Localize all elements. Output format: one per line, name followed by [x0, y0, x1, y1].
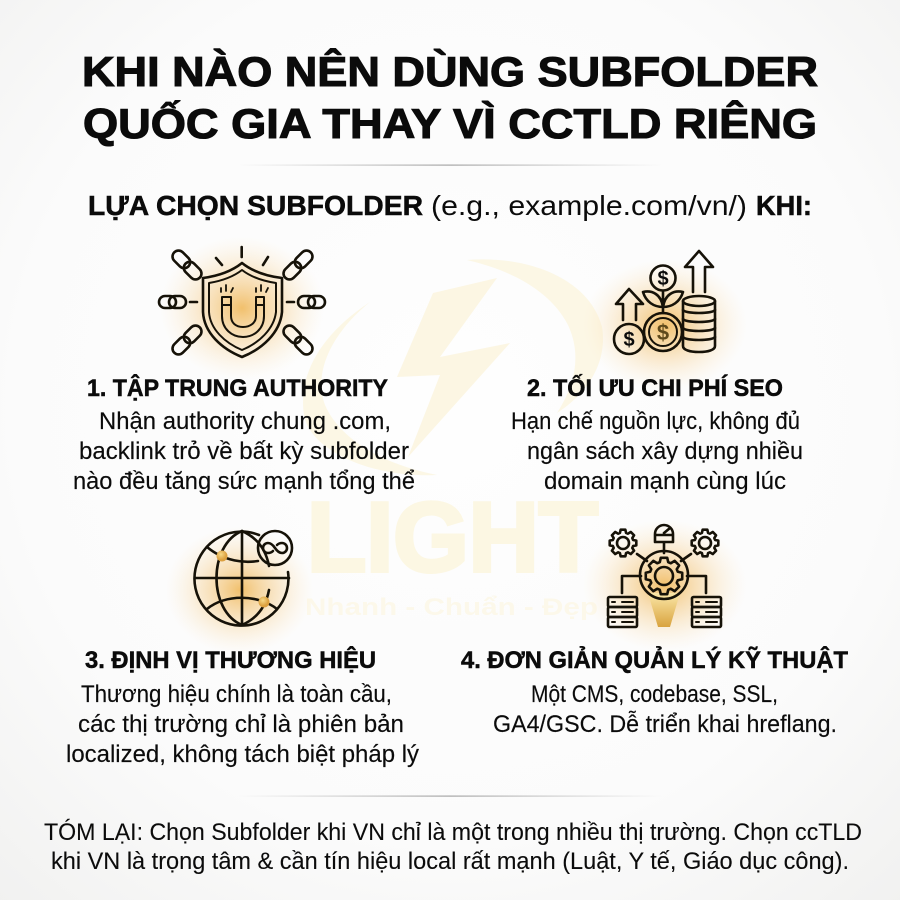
- heading: 2: 2. TỐI ƯU CHI PHÍ SEO: [527, 374, 783, 402]
- panel: 2 seo cost: [511, 251, 803, 495]
- text block: 1: Nhận authority chung .com,: [99, 408, 391, 435]
- icon: coins, plant and arrows: $: [623, 329, 635, 351]
- icon: coins, plant and arrows: $: [657, 320, 669, 345]
- watermark: LIGHT logo: Nhanh - Chuẩn - Đẹp: [305, 594, 598, 621]
- text block: 2: ngân sách xây dựng nhiều: [527, 438, 803, 465]
- text block: 1: backlink trỏ về bất kỳ subfolder: [79, 438, 409, 465]
- panel: 3 brand: [66, 526, 420, 768]
- watermark: LIGHT logo: [303, 259, 603, 621]
- summary: khi VN là trọng tâm & cần tín hiệu local rất mạnh (Luật, Y tế, Giáo dục công).: [51, 848, 849, 875]
- text block: 1: nào đều tăng sức mạnh tổng thể: [73, 468, 415, 495]
- text block: 2: domain mạnh cùng lúc: [544, 468, 786, 495]
- heading: 4: 4. ĐƠN GIẢN QUẢN LÝ KỸ THUẬT: [461, 645, 848, 674]
- text block: 3: [66, 681, 420, 768]
- text block: 4: GA4/GSC. Dễ triển khai hreflang.: [493, 711, 837, 738]
- title: KHI NÀO NÊN DÙNG SUBFOLDER: [82, 47, 818, 95]
- text block: 3: các thị trường chỉ là phiên bản: [78, 711, 404, 738]
- text block: 2: [511, 408, 803, 495]
- icon: shield with magnet and links: [159, 236, 325, 380]
- subtitle: LỰA CHỌN SUBFOLDER: [88, 190, 423, 221]
- icon: coins, plant and arrows: [583, 251, 747, 391]
- summary: TÓM LẠI: Chọn Subfolder khi VN chỉ là một trong nhiều thị trường. Chọn ccTLD: [44, 819, 862, 846]
- panel: 1 authority: [73, 236, 415, 495]
- text block: 4: Một CMS, codebase, SSL,: [531, 681, 778, 708]
- summary: [44, 819, 862, 875]
- icon: coins, plant and arrows: $: [657, 268, 669, 290]
- icon: globe with link badge: [166, 526, 314, 654]
- text block: 3: Thương hiệu chính là toàn cầu,: [81, 681, 392, 708]
- icon: gears and servers network: [582, 519, 746, 651]
- title: [82, 47, 818, 147]
- text block: 4: [493, 681, 837, 738]
- subtitle: (e.g., example.com/vn/): [431, 190, 747, 221]
- text block: 2: Hạn chế nguồn lực, không đủ: [511, 408, 800, 435]
- text block: 3: localized, không tách biệt pháp lý: [66, 741, 420, 768]
- title: QUỐC GIA THAY VÌ CCTLD RIÊNG: [83, 99, 817, 147]
- watermark: LIGHT logo: LIGHT: [307, 482, 598, 592]
- heading: 3: 3. ĐỊNH VỊ THƯƠNG HIỆU: [85, 646, 376, 674]
- subtitle: [88, 190, 812, 221]
- panel: 4 technical: [461, 519, 848, 738]
- heading: 1: 1. TẬP TRUNG AUTHORITY: [87, 374, 388, 402]
- subtitle: KHI:: [756, 190, 812, 221]
- text block: 1: [73, 408, 415, 495]
